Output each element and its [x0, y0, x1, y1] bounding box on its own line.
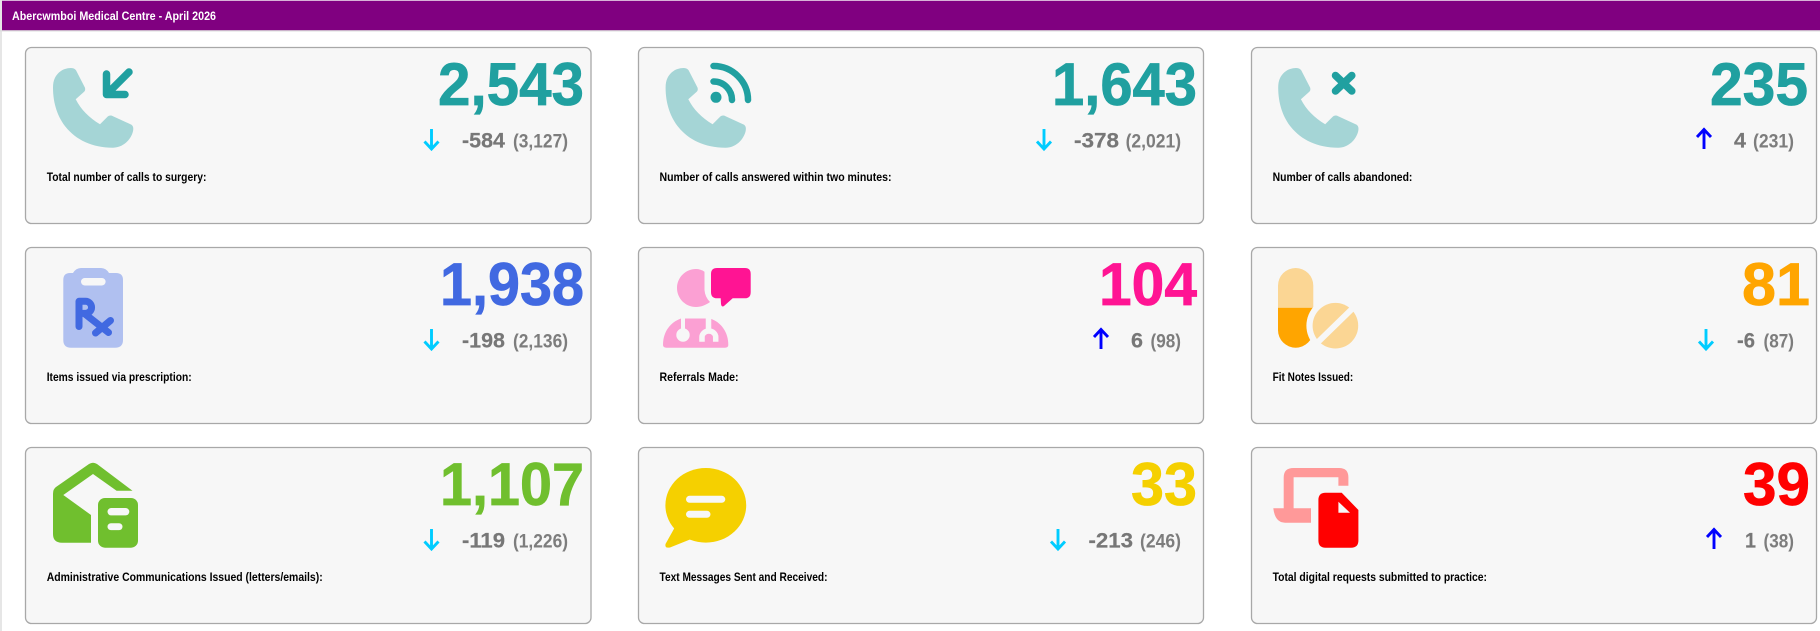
change: 4 (231): (231): [1753, 131, 1794, 152]
arrow: up: [1707, 530, 1721, 549]
change: 6 (98): (98): [1150, 331, 1181, 352]
panel: text messages sent and received: [638, 448, 1204, 624]
change: -584 (3,127): -584: [462, 129, 505, 152]
arrow: down: [424, 129, 438, 149]
icon: phone with cross: [1278, 68, 1358, 148]
change: -198 (2,136): -198: [462, 329, 505, 352]
value: 235: 235: [1710, 51, 1808, 118]
icon: incoming call: [53, 68, 133, 148]
value: 81: 81: [1742, 251, 1810, 318]
change: -378 (2,021): [1074, 129, 1181, 152]
icon: phone with signal: [666, 66, 748, 148]
change: -6 (87): -6: [1737, 329, 1755, 352]
value: 33: 33: [1131, 451, 1197, 518]
label: Text Messages Sent and Received:: [660, 572, 828, 584]
change: 4 (231): [1734, 129, 1794, 152]
value: 104: 104: [1099, 251, 1198, 318]
label: Number of calls answered within two minutes:: [660, 172, 892, 184]
arrow: down: [1699, 329, 1713, 349]
arrow: down: [424, 329, 438, 349]
change: -378 (2,021): -378: [1074, 129, 1119, 152]
panel: total digital requests: [1252, 448, 1816, 624]
label: Items issued via prescription:: [47, 372, 192, 384]
change: 1 (38): [1745, 529, 1794, 552]
change: -198 (2,136): (2,136): [513, 331, 568, 352]
label: Number of calls abandoned:: [1273, 172, 1412, 184]
change: -213 (246): -213: [1088, 529, 1133, 552]
header bar with title: [2, 1, 1820, 30]
value: 39: 39: [1743, 451, 1810, 518]
label: Referrals Made:: [660, 372, 738, 384]
icon: capsule and tablet: [1278, 268, 1364, 355]
change: -584 (3,127): (3,127): [513, 131, 568, 152]
value: 2,543: 2,543: [438, 51, 584, 118]
arrow: up: [1697, 130, 1711, 149]
arrow: up: [1094, 330, 1108, 349]
panel: total calls to surgery: [26, 48, 591, 224]
change: 6 (98): [1131, 329, 1181, 352]
arrow: down: [1051, 529, 1065, 549]
change: 1 (38): (38): [1764, 531, 1794, 552]
change: -119 (1,226): (1,226): [513, 531, 568, 552]
label: Total number of calls to surgery:: [47, 172, 206, 184]
change: 6 (98): 6: [1131, 329, 1143, 352]
label: Fit Notes Issued:: [1273, 372, 1353, 384]
change: 1 (38): 1: [1745, 529, 1756, 552]
icon: open envelope with document: [53, 463, 138, 548]
change: -378 (2,021): (2,021): [1126, 131, 1181, 152]
value: 1,938: 1,938: [440, 251, 584, 318]
icon: prescription clipboard: [63, 268, 123, 348]
panel: calls answered within two minutes: [638, 48, 1204, 224]
label: Administrative Communications Issued (letters/emails):: [47, 572, 323, 584]
panel: fit notes issued: [1252, 248, 1816, 424]
panel: referrals made: [638, 248, 1204, 424]
change: -198 (2,136): [462, 329, 568, 352]
change: -119 (1,226): [462, 529, 568, 552]
change: -213 (246): [1088, 529, 1181, 552]
change: -213 (246): (246): [1140, 531, 1181, 552]
change: -119 (1,226): -119: [462, 529, 505, 552]
panel: administrative communications issued: [26, 448, 591, 624]
arrow: down: [1037, 129, 1051, 149]
value: 1,107: 1,107: [440, 451, 584, 518]
arrow: down: [424, 529, 438, 549]
icon: digital request document: [1273, 468, 1358, 548]
header bar with title: Abercwmboi Medical Centre - April 2026: [12, 11, 216, 23]
icon: chat bubble: [665, 468, 746, 548]
change: -6 (87): (87): [1764, 331, 1794, 352]
panel: items issued via prescription: [26, 248, 591, 424]
change: 4 (231): 4: [1734, 129, 1746, 152]
label: Total digital requests submitted to practice:: [1273, 572, 1487, 584]
panel: calls abandoned: [1252, 48, 1816, 224]
change: -6 (87): [1737, 329, 1794, 352]
value: 1,643: 1,643: [1052, 51, 1197, 118]
change: -584 (3,127): [462, 129, 568, 152]
icon: clinician with speech bubble: [663, 268, 751, 348]
